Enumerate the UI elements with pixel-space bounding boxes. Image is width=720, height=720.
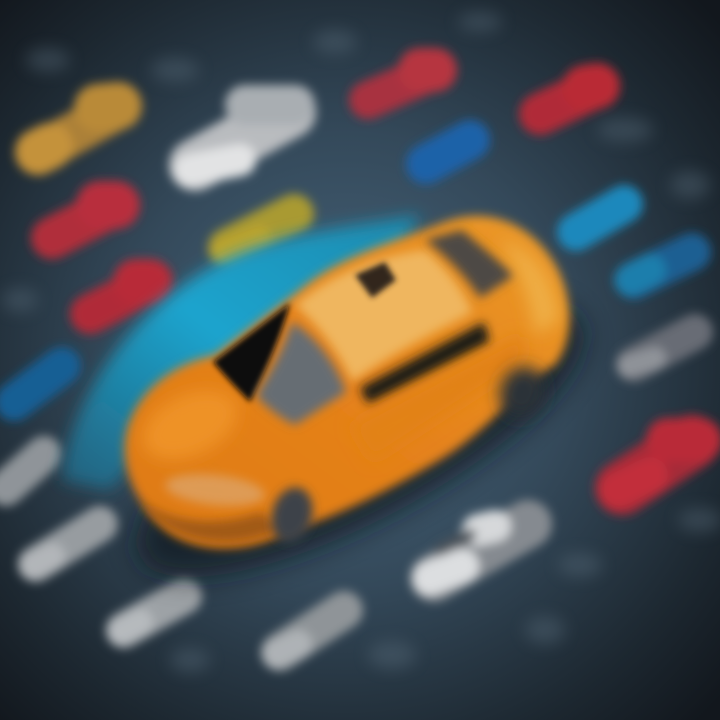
- car: red, left middle: [90, 282, 150, 314]
- car: blue, top: [426, 140, 470, 164]
- windshield dark: [213, 303, 290, 402]
- side window: [360, 322, 490, 404]
- lower front shade: [140, 500, 280, 542]
- front wheel: [265, 483, 319, 547]
- car: grey, right: [628, 332, 695, 366]
- rear wheel: [492, 360, 552, 424]
- car shadow: [102, 252, 618, 628]
- car body: [125, 216, 569, 548]
- front bumper highlight: [164, 470, 266, 510]
- car: white, left: [6, 454, 44, 488]
- car: white, bottom centre: [276, 610, 344, 654]
- car: blue, right middle: [630, 252, 692, 280]
- blue swoosh behind car: [62, 215, 420, 490]
- car: white, bottom right: [430, 524, 528, 578]
- hood highlight: [132, 377, 248, 473]
- windshield glass: [256, 322, 346, 425]
- roof vent: [355, 262, 396, 298]
- roof: [295, 250, 472, 382]
- main car: orange: [102, 216, 618, 628]
- car: red, left upper: [52, 205, 116, 238]
- car: red, top right: [540, 86, 597, 114]
- car: gold, top left: [38, 106, 118, 152]
- car: yellow, centre: [224, 214, 294, 252]
- side panel: [350, 335, 525, 462]
- rear highlight: [500, 240, 560, 335]
- car: red, right lower: [618, 440, 700, 490]
- car: white, top centre: [190, 105, 295, 170]
- car: blue, right upper: [576, 204, 624, 232]
- rear window: [425, 230, 515, 298]
- car: white, bottom: [120, 596, 184, 632]
- car: blue, left: [14, 366, 62, 402]
- car: red, top centre right: [368, 70, 435, 100]
- car: white, bottom left: [32, 524, 100, 566]
